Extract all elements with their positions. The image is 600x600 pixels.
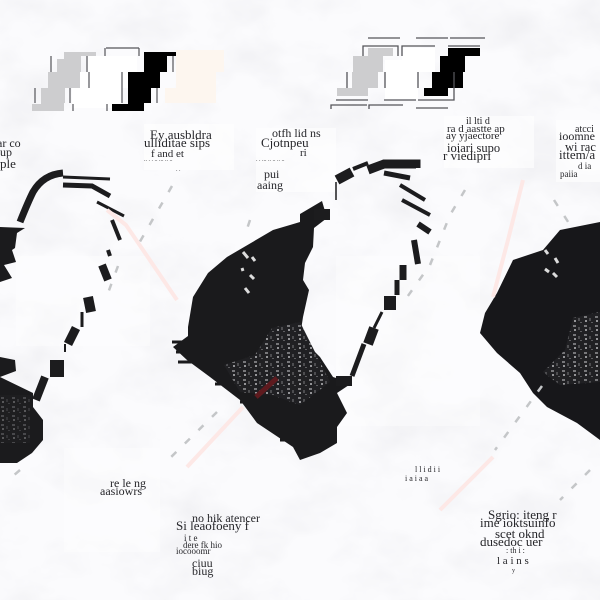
text block: top right one: r viedipri <box>443 148 491 163</box>
swatch: right black <box>424 48 480 96</box>
text block: top right one: il lti d <box>466 116 490 127</box>
text block: top right one: ioiari supo <box>447 141 500 155</box>
text block: top right two: atcci <box>575 124 594 135</box>
text block: top left: Ey ausbldra <box>150 127 212 142</box>
text block: bottom centre right: i a i a a <box>405 474 429 483</box>
text block: bottom centre <box>176 511 260 578</box>
text block: bottom left label: re le ng <box>110 476 146 490</box>
text block: bottom right: l a i n s <box>497 555 529 567</box>
text block: left margin: up <box>0 145 12 159</box>
text block: top right two: wi rac <box>565 140 596 154</box>
text block: bottom right: y <box>512 568 515 574</box>
pink lines <box>107 180 523 510</box>
text block: bottom centre: no hik atencer <box>192 511 260 525</box>
swatch frames: left <box>35 48 173 111</box>
text block: top right two: ittem/a <box>559 147 595 162</box>
swatch frames: right <box>331 38 485 109</box>
text block: top centre: aaing <box>257 178 283 192</box>
text block: left margin <box>0 136 21 171</box>
swatch: left grey <box>32 52 96 111</box>
text block: top right one: ra d aastte ap <box>447 123 505 135</box>
dark red strap <box>256 378 277 397</box>
text block: bottom centre: iocooomr <box>176 546 210 556</box>
lace detail: left <box>0 395 30 443</box>
text block: bottom centre: biug <box>192 564 213 578</box>
text block: bottom right: dusedoc uer <box>480 534 543 549</box>
white stitches on black <box>242 252 255 293</box>
text block: top left <box>144 124 234 173</box>
text block: top left: ulliditae sips <box>144 135 210 150</box>
text block: top right two <box>556 120 600 182</box>
swatches: right palette <box>331 38 485 109</box>
lingerie: centre black panel <box>172 201 352 460</box>
swatch: left white <box>72 56 137 108</box>
text block: top centre: . . ... .. .. .. .. <box>256 157 285 163</box>
text block: top centre: otfh lid ns <box>272 126 321 140</box>
swatch: peach <box>165 50 224 103</box>
text block: top right one: ay yjaectore <box>446 130 500 142</box>
text block: top left: . . <box>176 167 181 173</box>
grey dashes <box>6 186 590 500</box>
text block: bottom left label <box>100 476 146 498</box>
swatch: right white <box>385 48 435 100</box>
strap: left loop <box>20 173 124 400</box>
text block: top left: .. . . .. ... .. .. <box>144 157 173 163</box>
white stitches on black <box>545 250 558 277</box>
text block: bottom centre: dere fk hio <box>183 540 222 550</box>
text block: top right two: ioomne <box>559 129 595 143</box>
text block: bottom centre right <box>405 465 441 483</box>
text block: top right two: d ia <box>578 161 591 171</box>
text block: left margin: ple <box>0 156 16 171</box>
text block: bottom right: : th i : <box>506 546 525 555</box>
text block: bottom centre: i t e <box>184 533 198 543</box>
lingerie: right black panel <box>480 222 600 440</box>
lace detail: right <box>543 312 600 385</box>
text block: top centre: ri <box>300 147 307 159</box>
text block: bottom centre: ciuu <box>192 556 213 570</box>
text block: top left: f and et <box>151 148 184 160</box>
swatches: left palette <box>32 48 224 111</box>
text block: top centre: pui <box>264 167 280 181</box>
lingerie: left black panel <box>0 227 43 463</box>
text block: top right two: paiia <box>560 169 578 179</box>
text block: top right one <box>443 116 534 168</box>
text block: bottom right: ime ioktsuinfo <box>480 515 555 530</box>
text block: top centre <box>256 126 336 192</box>
text block: bottom left label: aasiowrs <box>100 484 142 498</box>
lace detail: centre <box>224 322 330 405</box>
swatch: left black <box>112 52 176 111</box>
text block: bottom right: Sgrio: iteng r <box>488 507 557 522</box>
text block: bottom centre: Si leaofoeny f <box>176 518 250 533</box>
lace frills: centre <box>172 342 300 440</box>
text block: bottom right: scet oknd <box>495 526 545 541</box>
strap: centre loop <box>322 163 430 386</box>
swatch: right grey <box>337 48 393 96</box>
text block: bottom right <box>480 507 557 574</box>
text block: top centre: Cjotnpeu <box>261 135 309 150</box>
text block: bottom centre right: l l i d i i <box>415 465 441 474</box>
